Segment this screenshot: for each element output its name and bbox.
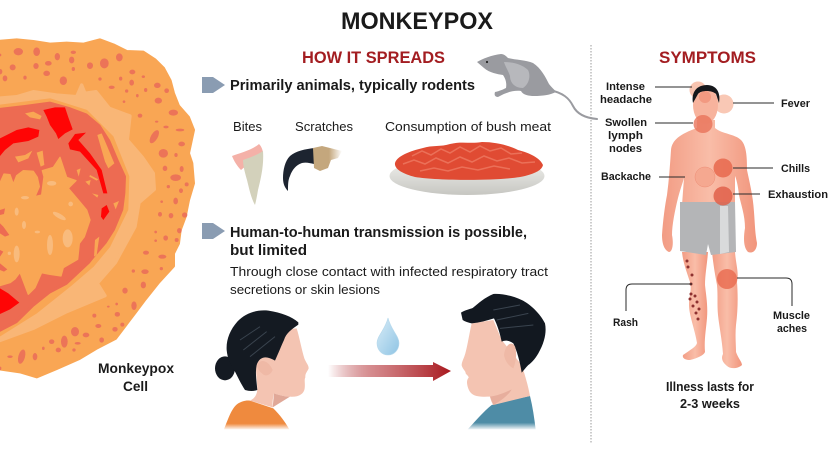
text: human-to-human heading	[230, 224, 527, 259]
torso and arms	[662, 120, 757, 253]
text: transmission routes	[233, 119, 551, 134]
cell label: Monkeypox	[98, 361, 175, 376]
illustration: woman profile	[215, 310, 309, 429]
text: transmission routes: Bites	[233, 119, 262, 134]
icon: claw	[283, 146, 342, 191]
face shading	[699, 91, 711, 103]
heading: how it spreads: HOW IT SPREADS	[302, 48, 445, 67]
symptom: backache	[695, 167, 715, 187]
symptom labels: Fever	[781, 98, 811, 110]
text: human transmission detail: secretions or skin lesions	[230, 282, 381, 297]
symptom labels: nodes	[609, 143, 642, 155]
icon: plate of bush meat	[390, 142, 544, 195]
text: human transmission detail	[230, 264, 548, 297]
text: illness duration	[666, 379, 754, 411]
symptom: fever	[714, 94, 734, 114]
head	[693, 86, 718, 124]
symptom labels: aches	[777, 323, 807, 335]
symptom: swollen lymph nodes	[694, 115, 712, 133]
symptom labels: Swollen	[605, 117, 647, 129]
icon: tooth	[232, 144, 263, 205]
illustration: human body with symptom areas	[662, 82, 757, 368]
text: human transmission detail: Through close contact with infected respiratory tract	[230, 264, 548, 279]
arrow: human transmission bullet	[202, 223, 225, 239]
text: illness duration: 2-3 weeks	[680, 396, 740, 411]
illustration: man profile	[461, 294, 546, 429]
cell label: Cell	[123, 379, 148, 394]
symptom: rash	[686, 260, 700, 320]
hair	[693, 85, 719, 103]
text: primarily animals: Primarily animals, typically rodents	[230, 77, 475, 94]
orange islands in the salmon ring	[15, 112, 119, 257]
symptom labels: Muscle	[773, 310, 810, 322]
symptom labels: Chills	[781, 163, 810, 175]
text: transmission routes: Scratches	[295, 119, 353, 134]
shorts	[680, 202, 736, 255]
illustration: droplet	[377, 318, 399, 355]
text: transmission routes: Consumption of bush meat	[385, 119, 551, 134]
arrow: rodents bullet	[202, 77, 225, 93]
text: human-to-human heading: but limited	[230, 242, 307, 259]
symptom labels: Intense	[606, 81, 645, 93]
heading: symptoms: SYMPTOMS	[659, 48, 756, 67]
cell label	[98, 361, 175, 394]
symptom: exhaustion	[714, 186, 732, 206]
cell membrane spots	[0, 47, 189, 370]
symptom labels: headache	[600, 94, 652, 106]
arrow: transmission direction	[328, 362, 451, 381]
symptom labels: Backache	[601, 171, 651, 183]
left leg	[682, 252, 708, 360]
red patches	[0, 107, 109, 314]
divider	[590, 45, 592, 443]
symptom labels: Rash	[613, 317, 638, 329]
icon: rat	[477, 54, 597, 119]
symptom: muscle aches	[717, 269, 737, 289]
leader lines	[626, 87, 792, 311]
symptom: headache	[690, 82, 706, 98]
text: illness duration: Illness lasts for	[666, 379, 754, 394]
text: human-to-human heading: Human-to-human transmission is possible,	[230, 224, 527, 241]
cell nucleus	[0, 157, 90, 294]
symptom: chills	[714, 158, 732, 178]
title: MONKEYPOX	[341, 8, 493, 35]
symptom labels: Exhaustion	[768, 189, 828, 201]
symptom labels: lymph	[608, 130, 643, 142]
right leg	[712, 252, 742, 368]
symptom labels	[600, 81, 828, 335]
panel: monkeypox cell illustration	[0, 40, 193, 377]
